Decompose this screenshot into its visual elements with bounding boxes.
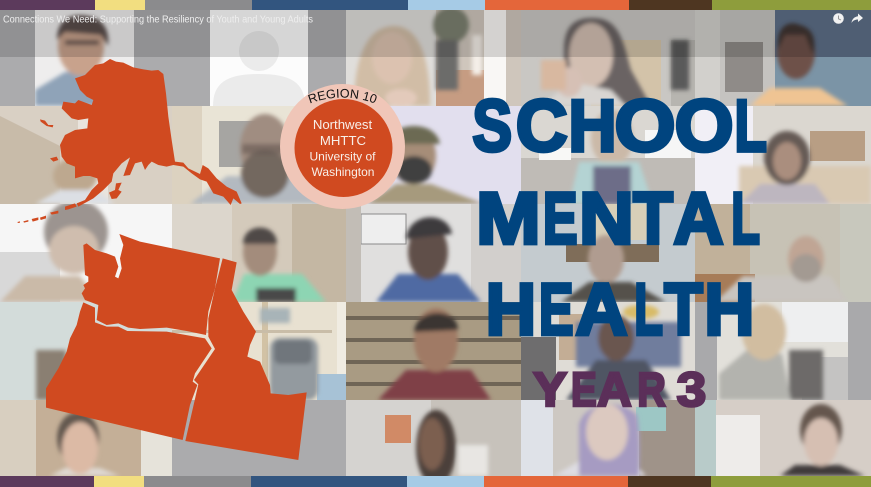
- heading: School Mental Health: O: [675, 86, 734, 167]
- icon: clock: [833, 13, 844, 24]
- top video overlay shade: [0, 10, 871, 57]
- photo: man in plaid shirt: [695, 204, 871, 302]
- heading: School Mental Health: L: [731, 178, 760, 260]
- badge organisation text: MHTTC: [320, 133, 367, 148]
- subheading: Year 3: A: [597, 363, 632, 417]
- heading: School Mental Health: E: [539, 270, 574, 350]
- photo: man in dark shirt: [521, 204, 695, 302]
- photo: woman in yellow top: [695, 10, 871, 106]
- photo: man in green shirt: [172, 204, 346, 302]
- heading: School Mental Health: T: [633, 178, 673, 260]
- gray empty tile row 4 right: [848, 302, 871, 400]
- badge organisation text: University of: [309, 150, 376, 164]
- heading: School Mental Health: C: [516, 86, 568, 167]
- map: Alaska: [17, 59, 242, 223]
- photo: smiling man with glasses: [35, 10, 134, 106]
- photo: woman with glasses in black top: [695, 400, 871, 476]
- photo: woman resting chin on hand: [521, 10, 695, 106]
- heading: School Mental Health: L: [734, 86, 767, 167]
- icon: share arrow: [852, 14, 863, 23]
- badge organisation text: [309, 117, 376, 179]
- heading: School Mental Health: [472, 86, 767, 350]
- heading: School Mental Health: O: [615, 86, 676, 167]
- badge: Region 10 Northwest MHTTC: [280, 84, 405, 209]
- heading: School Mental Health: T: [664, 270, 703, 350]
- subheading: Year 3: Y: [533, 363, 567, 417]
- photo: man in blue hoodie: [346, 204, 521, 302]
- gray empty tile row 4 left: [695, 302, 717, 400]
- subheading: Year 3: R: [637, 363, 666, 417]
- heading: School Mental Health: N: [579, 178, 634, 260]
- badge inner circle: [294, 99, 392, 197]
- bottom colour bar: [0, 476, 871, 487]
- photo: man with cap and mask: [367, 106, 521, 204]
- heading: School Mental Health: L: [634, 270, 663, 350]
- heading: School Mental Health: A: [576, 270, 628, 350]
- photo: bald man with beard: [172, 106, 318, 204]
- badge organisation text: Washington: [312, 165, 374, 179]
- state: Idaho: [185, 258, 307, 460]
- photo: woman in teal hoodie: [521, 106, 695, 204]
- top colour bar: [0, 0, 871, 10]
- video title: Connections We Need: Supporting the Resiliency of Youth and Young Adults: [3, 14, 313, 26]
- gray empty tile row 5: [172, 400, 346, 476]
- map: Washington, Oregon and Idaho: [46, 234, 307, 460]
- heading: School Mental Health: H: [568, 86, 616, 167]
- photo: blond woman in gray sweater: [717, 302, 848, 400]
- photo: room with door and hidden man: [0, 106, 172, 204]
- heading: School Mental Health: E: [543, 178, 578, 260]
- photo: man in navy with yellow flowers: [521, 302, 695, 400]
- photo: person with dark glasses: [0, 204, 172, 302]
- gray empty tile row 1 right: [308, 10, 346, 106]
- gray empty tile row 1 middle: [134, 10, 210, 106]
- gray empty tile row 1 left: [0, 10, 35, 106]
- state: Washington: [82, 234, 220, 335]
- curved label: REGION 10: [308, 88, 377, 104]
- photo: man in maroon before bookshelf: [346, 302, 521, 400]
- subheading: Year 3: 3: [677, 363, 706, 417]
- photo: blond woman and lamp room: [346, 10, 521, 106]
- heading: School Mental Health: H: [704, 270, 754, 350]
- state: Oregon: [46, 302, 212, 440]
- badge organisation text: Northwest: [313, 117, 373, 132]
- photo: blank avatar: [213, 31, 304, 106]
- heading: School Mental Health: H: [486, 270, 536, 350]
- photo: woman with braids and knit wall: [346, 400, 521, 476]
- photo: pale wall with armchair: [0, 302, 172, 400]
- heading: School Mental Health: M: [476, 178, 541, 260]
- subheading: Year 3: E: [571, 363, 597, 417]
- photo: office chair and bookcase: [172, 302, 346, 400]
- photo: woman with purple hair: [521, 400, 695, 476]
- photo: woman with glasses before wood panel: [0, 400, 172, 476]
- heading: School Mental Health: S: [472, 86, 512, 167]
- badge outer ring: [280, 84, 405, 209]
- photo: woman with glasses on sofa: [695, 106, 871, 204]
- heading: School Mental Health: A: [674, 178, 724, 260]
